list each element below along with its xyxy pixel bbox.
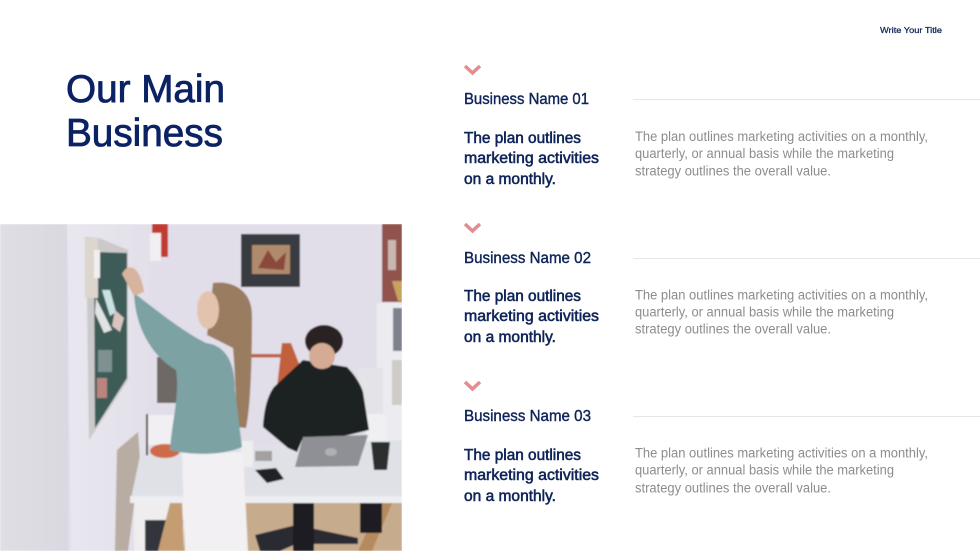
desk bbox=[131, 440, 402, 496]
item 01 name: Business Name 01 bbox=[464, 91, 589, 108]
item 02 description: The plan outlines marketing activities on a monthly, bbox=[635, 288, 928, 302]
item 03 bbox=[464, 382, 980, 505]
hair back bbox=[207, 282, 252, 428]
item 01 description: The plan outlines marketing activities on a monthly, bbox=[635, 129, 928, 144]
item 02 description: strategy outlines the overall value. bbox=[635, 322, 831, 336]
monitor and desk items behind woman bbox=[157, 357, 178, 403]
chair bbox=[255, 525, 358, 551]
item 02 bold text bbox=[464, 288, 599, 346]
item 01 bold text bbox=[464, 130, 599, 188]
item 01 bold text: on a monthly. bbox=[464, 171, 556, 188]
title bbox=[66, 68, 225, 155]
sweater bbox=[134, 293, 242, 454]
item 02 description: quarterly, or annual basis while the marketing bbox=[635, 304, 894, 320]
item 02 bold text: on a monthly. bbox=[464, 329, 556, 346]
photo: two people working in an office bbox=[0, 224, 402, 551]
item 03 description: The plan outlines marketing activities on a monthly, bbox=[635, 446, 928, 460]
item 03 bold text: marketing activities bbox=[464, 467, 599, 484]
man bbox=[263, 360, 369, 452]
face bbox=[197, 291, 219, 329]
title: Our Main bbox=[66, 68, 225, 111]
item 01 bold text: marketing activities bbox=[464, 150, 599, 167]
red box on wall bbox=[152, 224, 168, 257]
item 03 name: Business Name 03 bbox=[464, 408, 591, 425]
white cup and phones bbox=[241, 441, 253, 467]
item 02 name: Business Name 02 bbox=[464, 250, 591, 267]
item 01 description bbox=[635, 129, 928, 178]
icon: chevron bbox=[465, 224, 480, 231]
cup bbox=[371, 442, 390, 470]
floor bbox=[183, 502, 402, 551]
icon: chevron bbox=[465, 66, 480, 73]
desk lamp bbox=[250, 354, 286, 358]
item 03 bold text: The plan outlines bbox=[464, 447, 581, 464]
item 02 bbox=[464, 224, 980, 346]
item 01 bold text: The plan outlines bbox=[464, 130, 581, 147]
item 01 description: strategy outlines the overall value. bbox=[635, 164, 831, 178]
icon: chevron bbox=[465, 382, 480, 389]
item 02 bold text: marketing activities bbox=[464, 308, 599, 325]
walls bbox=[68, 224, 402, 551]
chalkboard bbox=[85, 237, 128, 440]
item 01 bbox=[464, 66, 980, 188]
framed picture bbox=[241, 234, 300, 287]
header label: Write Your Title bbox=[880, 25, 942, 35]
item 03 bold text bbox=[464, 447, 599, 505]
item 03 bold text: on a monthly. bbox=[464, 488, 556, 505]
right painting and shelf bbox=[382, 224, 402, 302]
hand bbox=[122, 267, 144, 296]
title: Business bbox=[66, 112, 223, 155]
item 03 description: quarterly, or annual basis while the marketing bbox=[635, 462, 894, 478]
laptop bbox=[295, 435, 368, 467]
item 03 description bbox=[635, 446, 928, 496]
item 01 description: quarterly, or annual basis while the marketing bbox=[635, 146, 894, 161]
item 03 description: strategy outlines the overall value. bbox=[635, 480, 831, 496]
item 02 description bbox=[635, 288, 928, 336]
item 02 bold text: The plan outlines bbox=[464, 288, 581, 305]
jeans bbox=[182, 452, 248, 551]
